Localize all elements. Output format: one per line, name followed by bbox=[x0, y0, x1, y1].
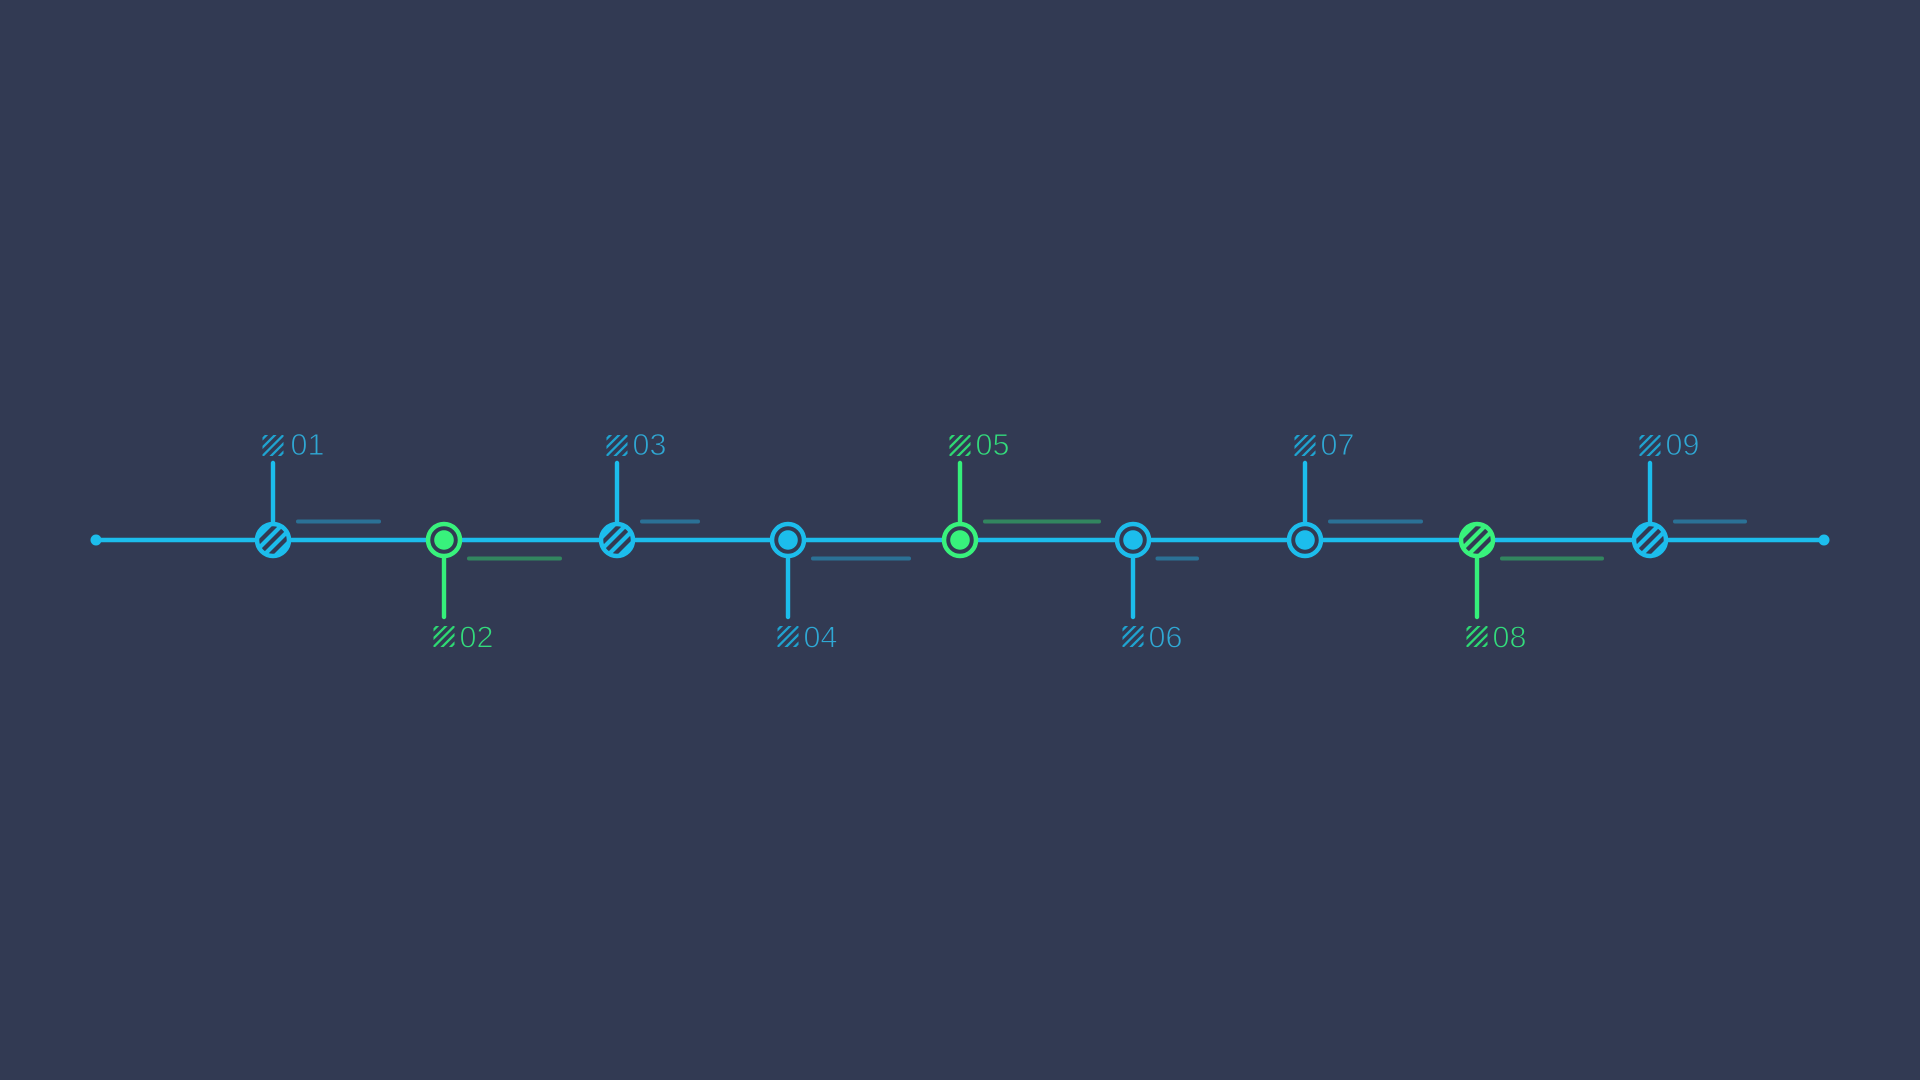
milestone 09: 09 bbox=[1666, 428, 1699, 462]
milestone 07 bbox=[1289, 428, 1421, 556]
milestone 08: 08 bbox=[1492, 620, 1526, 654]
milestone 09 bbox=[1626, 428, 1745, 570]
milestone 06: 06 bbox=[1148, 620, 1182, 654]
milestone 01: 01 bbox=[290, 428, 324, 462]
milestone 01 bbox=[249, 428, 379, 570]
milestone 04 bbox=[772, 524, 909, 654]
milestone 02: 02 bbox=[460, 620, 493, 654]
milestone 08 bbox=[1453, 516, 1602, 654]
milestone 03 bbox=[593, 428, 698, 570]
milestone 04: 04 bbox=[804, 620, 837, 654]
milestone 07: 07 bbox=[1320, 428, 1354, 462]
milestone 06 bbox=[1117, 524, 1197, 654]
timeline axis bbox=[90, 534, 1830, 546]
milestone 02 bbox=[428, 524, 560, 654]
milestone 03: 03 bbox=[632, 428, 666, 462]
milestone 05 bbox=[944, 428, 1099, 556]
milestone 05: 05 bbox=[976, 428, 1009, 462]
